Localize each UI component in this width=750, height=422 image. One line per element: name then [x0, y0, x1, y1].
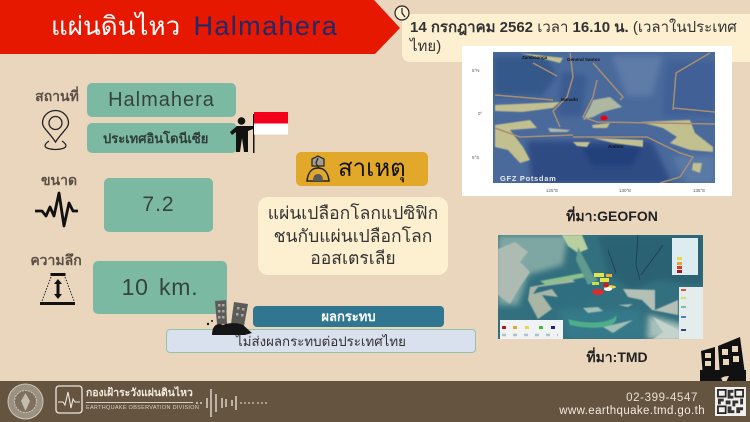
map: GEOFON: Zamboanga [522, 55, 548, 60]
icon: clock [394, 5, 410, 21]
impact text [166, 329, 476, 353]
value: location name: Halmahera [108, 88, 215, 110]
date text [409, 18, 737, 55]
map: GEOFON: 0° [478, 111, 483, 116]
header banner [0, 0, 400, 54]
value: depth: 10 km. [122, 274, 198, 300]
cause text: ออสเตรเลีย [310, 248, 396, 268]
website: www.earthquake.tmd.go.th [559, 405, 705, 417]
map: GEOFON: Ambon [608, 144, 624, 149]
map: TMD [498, 235, 703, 339]
value: country [87, 123, 237, 153]
map: GEOFON [462, 46, 732, 196]
icon: seismic wave [35, 192, 78, 228]
date text: 14 กรกฎาคม 2562 เวลา 16.10 น. (เวลาในประเทศ [410, 19, 737, 36]
value: depth [93, 261, 227, 314]
footer bar [0, 381, 750, 422]
value: magnitude: 7.2 [142, 193, 175, 216]
map: GEOFON: 5°N [472, 68, 480, 73]
value: country: ประเทศอินโดนีเซีย [103, 130, 208, 146]
decorative waveform [196, 389, 267, 417]
date text: ไทย) [410, 38, 441, 55]
phone number: 02-399-4547 [626, 392, 698, 404]
map: GEOFON: General Santos [567, 57, 601, 62]
map: GEOFON: 130°E [619, 188, 631, 193]
caption: GEOFON source: ที่มา:GEOFON [566, 208, 658, 224]
label: location: สถานที่ [35, 88, 79, 104]
label: depth: ความลึก [30, 252, 82, 268]
QR code [715, 387, 746, 416]
map: GEOFON: Manado [561, 97, 578, 102]
icon: damaged buildings [206, 300, 252, 335]
logo: earthquake division icon [55, 385, 83, 414]
date and time box [402, 14, 750, 62]
cause badge [296, 152, 428, 186]
title: แผ่นดินไหว Halmahera [51, 11, 338, 41]
icon: depth [40, 273, 75, 305]
impact heading [253, 306, 444, 327]
map: GEOFON: 125°E [546, 188, 558, 193]
logo: department seal [8, 384, 44, 420]
division name: กองเฝ้าระวังแผ่นดินไหว [86, 388, 193, 399]
impact text: ไม่ส่งผลกระทบต่อประเทศไทย [236, 334, 406, 348]
cause text: ชนกับแผ่นเปลือกโลก [274, 226, 432, 246]
cause heading: สาเหตุ [338, 155, 406, 182]
cause text: แผ่นเปลือกโลกแปซิฟิก [268, 203, 438, 223]
label: magnitude: ขนาด [41, 172, 77, 188]
map: GEOFON: GFZ Potsdam [500, 174, 556, 183]
icon: location pin [42, 110, 70, 150]
division name [86, 386, 193, 403]
value: magnitude [104, 178, 213, 232]
division name in English: EARTHQUAKE OBSERVATION DIVISION [86, 405, 199, 411]
caption: TMD source: ที่มา:TMD [586, 349, 648, 365]
impact heading: ผลกระทบ [321, 309, 376, 324]
cause text [258, 197, 448, 275]
value: location name [87, 83, 236, 117]
icon: ground crack [306, 155, 330, 182]
icon: person with flag [230, 112, 288, 153]
icon: collapsing buildings [700, 337, 746, 381]
map: GEOFON: 5°S [472, 155, 479, 160]
map: GEOFON: 135°E [693, 188, 705, 193]
